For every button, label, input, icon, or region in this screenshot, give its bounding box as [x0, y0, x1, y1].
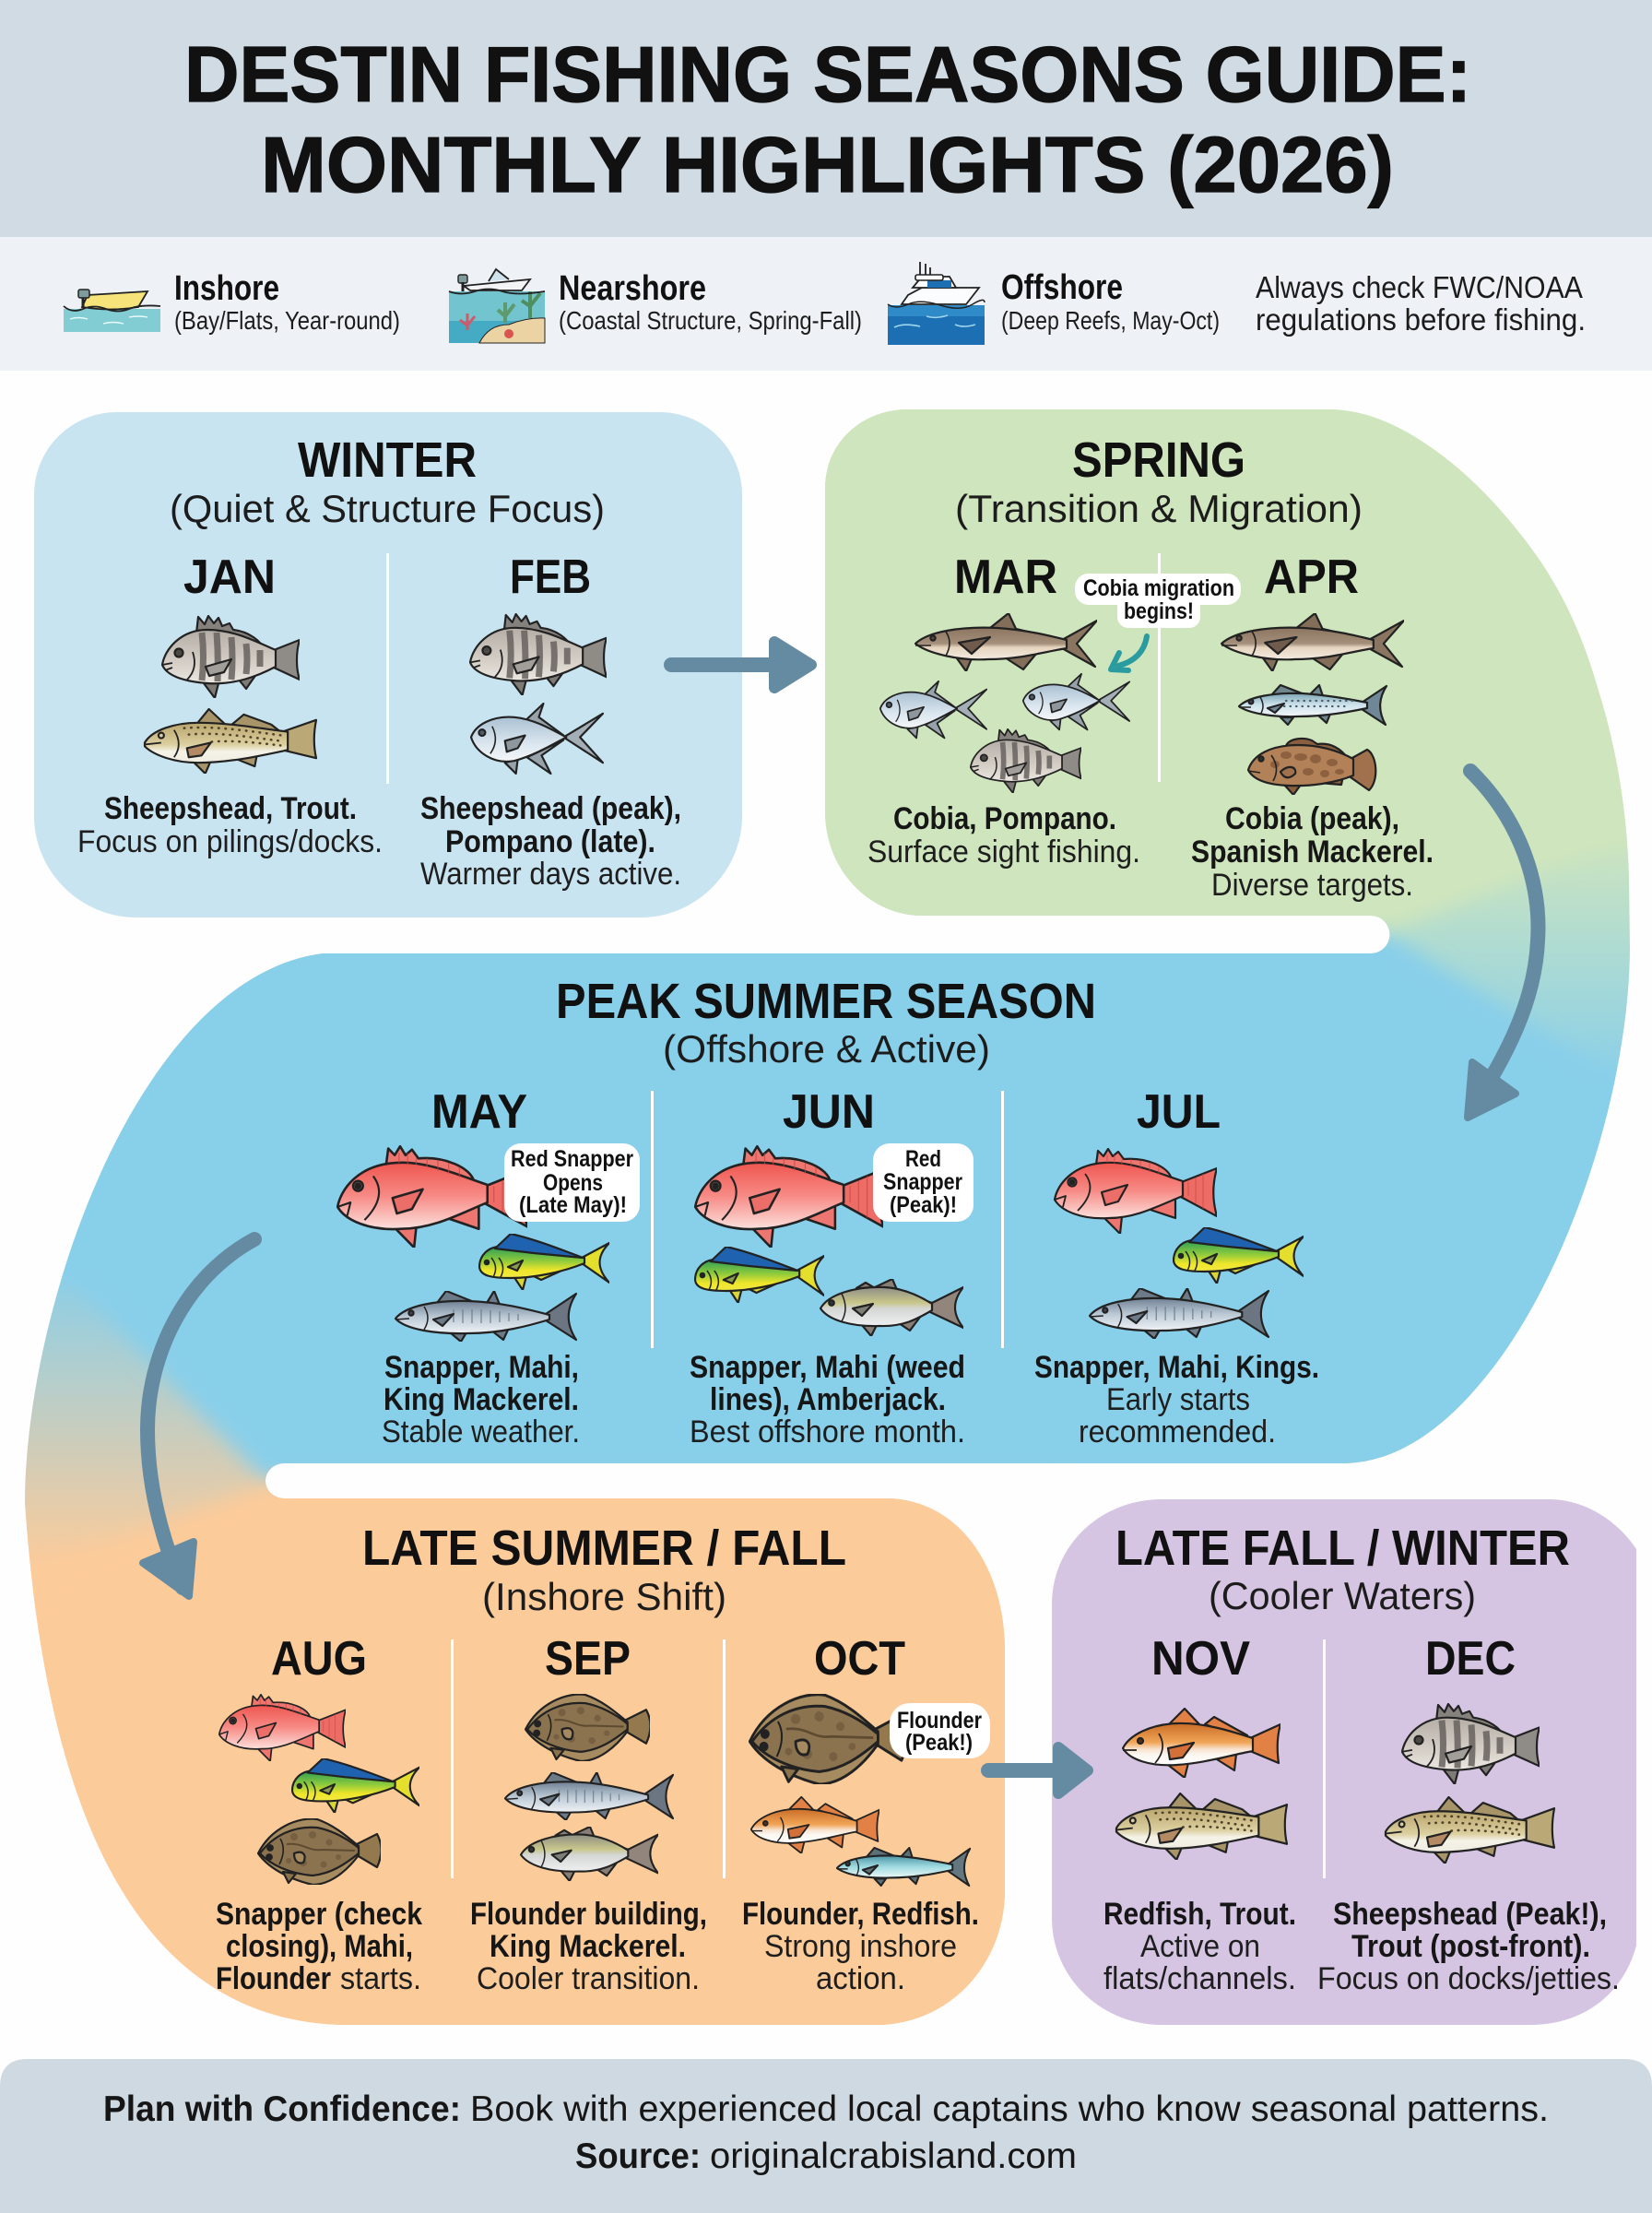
month: december [1317, 1632, 1620, 1996]
month: january [77, 550, 383, 859]
legend: regulations note: regulations before fishing. [1256, 302, 1586, 337]
header band with title: DESTIN FISHING SEASONS GUIDE: [184, 31, 1471, 119]
callout: flounder peak: Flounder [897, 1708, 982, 1734]
panel: late fall and winter: (Cooler Waters) [1209, 1574, 1476, 1617]
month: march [867, 550, 1140, 870]
icon: offshore sportfisher [888, 262, 985, 345]
footer band: originalcrabisland.com [710, 2136, 1077, 2176]
month: august: Snapper (check [216, 1897, 422, 1932]
month: november: Redfish, Trout. [1103, 1897, 1296, 1932]
month: may: King Mackerel. [384, 1382, 579, 1417]
legend: nearshore label: (Coastal Structure, Spring-Fall) [559, 306, 862, 335]
callout: cobia migration: begins! [1124, 598, 1194, 624]
month: august: starts. [340, 1961, 421, 1996]
footer band: Book with experienced local captains who know seasonal patterns. [470, 2089, 1549, 2129]
panel: late summer and fall content [216, 1521, 990, 1996]
month: september: Cooler transition. [477, 1961, 700, 1996]
arrow: winter to spring [671, 642, 811, 688]
legend: inshore label [174, 269, 400, 335]
callout: red snapper peak: Snapper [883, 1169, 962, 1195]
month: june: JUN [783, 1085, 875, 1139]
month: december: Focus on docks/jetties. [1317, 1961, 1620, 1996]
legend: offshore label: (Deep Reefs, May-Oct) [1001, 306, 1220, 335]
callout: red snapper peak: (Peak)! [890, 1192, 957, 1218]
month: december: Trout (post-front). [1351, 1929, 1590, 1964]
arrow: teal callout pointer [1111, 636, 1147, 670]
month: april: Cobia (peak), [1225, 801, 1399, 836]
panel: connected spring, summer and fall ribbon [0, 387, 1652, 2121]
arrow: spring to summer [1468, 771, 1538, 1118]
month: february: Pompano (late). [445, 824, 655, 859]
panel: winter: (Quiet & Structure Focus) [170, 487, 605, 530]
month: november: NOV [1151, 1632, 1250, 1686]
month: july [1034, 1085, 1319, 1450]
month: october [742, 1632, 990, 1996]
month: july: JUL [1137, 1085, 1221, 1139]
header band with title [0, 0, 1652, 237]
panel: late summer and fall content: LATE SUMMER / FALL [362, 1521, 846, 1576]
month: september: Flounder building, [470, 1897, 707, 1932]
month: september: King Mackerel. [490, 1929, 686, 1964]
legend band [0, 237, 1652, 371]
month: april: Spanish Mackerel. [1191, 834, 1434, 870]
legend: regulations note: Always check FWC/NOAA [1256, 270, 1583, 304]
month: june: Snapper, Mahi (weed [690, 1350, 965, 1385]
callout: red snapper opens: Red Snapper [511, 1146, 633, 1172]
month: march: Cobia, Pompano. [893, 801, 1116, 836]
footer band: Source: [575, 2136, 701, 2176]
panel: spring content: SPRING [1072, 432, 1245, 488]
legend: inshore label: (Bay/Flats, Year-round) [174, 306, 400, 335]
arrow: summer to fall [143, 1239, 254, 1596]
callout: cobia migration: Cobia migration [1083, 575, 1234, 601]
panel: spring content: (Transition & Migration) [955, 487, 1363, 530]
month: october: OCT [814, 1632, 905, 1686]
panel: peak summer content [337, 974, 1319, 1450]
legend: nearshore label [559, 269, 862, 335]
footer band: Plan with Confidence: [103, 2089, 461, 2129]
month: november: flats/channels. [1103, 1961, 1296, 1996]
month: april: Diverse targets. [1211, 868, 1413, 903]
header band with title: MONTHLY HIGHLIGHTS (2026) [261, 122, 1394, 209]
footer band [0, 2059, 1652, 2213]
month: december: DEC [1425, 1632, 1516, 1686]
month: may: Stable weather. [382, 1414, 580, 1450]
month: november [1103, 1632, 1296, 1996]
legend: regulations note [1256, 270, 1586, 337]
month: july: Snapper, Mahi, Kings. [1034, 1350, 1319, 1385]
legend: offshore label: Offshore [1001, 268, 1123, 307]
month: august [216, 1632, 422, 1996]
month: august: closing), Mahi, [226, 1929, 413, 1964]
month: april: APR [1264, 550, 1359, 604]
month: october: Strong inshore [764, 1929, 957, 1964]
legend: offshore label [1001, 268, 1220, 335]
month: december: Sheepshead (Peak!), [1333, 1897, 1607, 1932]
panel: winter [34, 412, 742, 917]
month: february: FEB [510, 550, 591, 604]
callout: red snapper opens [504, 1143, 640, 1222]
month: may [337, 1085, 640, 1450]
month: may: Snapper, Mahi, [384, 1350, 579, 1385]
legend: nearshore label: Nearshore [559, 269, 706, 308]
month: september: SEP [545, 1632, 631, 1686]
callout: red snapper opens: (Late May)! [519, 1192, 627, 1218]
callout: red snapper opens: Opens [543, 1170, 603, 1196]
panel: late fall and winter: LATE FALL / WINTER [1115, 1521, 1570, 1576]
month: october: Flounder, Redfish. [742, 1897, 979, 1932]
panel: peak summer content: (Offshore & Active) [663, 1027, 990, 1071]
callout: flounder peak: (Peak!) [905, 1730, 973, 1756]
month: february: Warmer days active. [420, 857, 681, 892]
panel: late fall and winter [1052, 1499, 1636, 2025]
month: february [420, 550, 681, 892]
panel: peak summer content: PEAK SUMMER SEASON [556, 974, 1096, 1029]
callout: cobia migration [1075, 574, 1241, 628]
month: november: Active on [1140, 1929, 1260, 1964]
icon: nearshore boat and reef [449, 269, 545, 343]
month: june: Best offshore month. [690, 1414, 965, 1450]
month: september [470, 1632, 707, 1996]
month: april [1191, 550, 1434, 903]
panel: spring content [867, 432, 1434, 903]
month: august: Flounder [216, 1961, 331, 1996]
month: june: lines), Amberjack. [710, 1382, 946, 1417]
month: january: JAN [183, 550, 276, 604]
icon: inshore skiff [64, 290, 160, 332]
callout: red snapper peak: Red [905, 1146, 941, 1172]
month: july: Early starts [1106, 1382, 1250, 1417]
month: august: AUG [271, 1632, 367, 1686]
month: july: recommended. [1079, 1414, 1276, 1450]
month: march: MAR [954, 550, 1057, 604]
arrow: fall to late fall [988, 1747, 1088, 1793]
panel: winter: WINTER [298, 432, 477, 488]
legend: inshore label: Inshore [174, 269, 279, 308]
callout: flounder peak [890, 1703, 990, 1758]
month: may: MAY [431, 1085, 527, 1139]
month: february: Sheepshead (peak), [420, 791, 681, 826]
month: october: action. [816, 1961, 905, 1996]
month: march: Surface sight fishing. [867, 834, 1140, 870]
month: june [690, 1085, 974, 1450]
panel: late summer and fall content: (Inshore Shift) [482, 1575, 726, 1618]
month: january: Sheepshead, Trout. [104, 791, 357, 826]
month: january: Focus on pilings/docks. [77, 824, 383, 859]
callout: red snapper peak [873, 1143, 974, 1222]
